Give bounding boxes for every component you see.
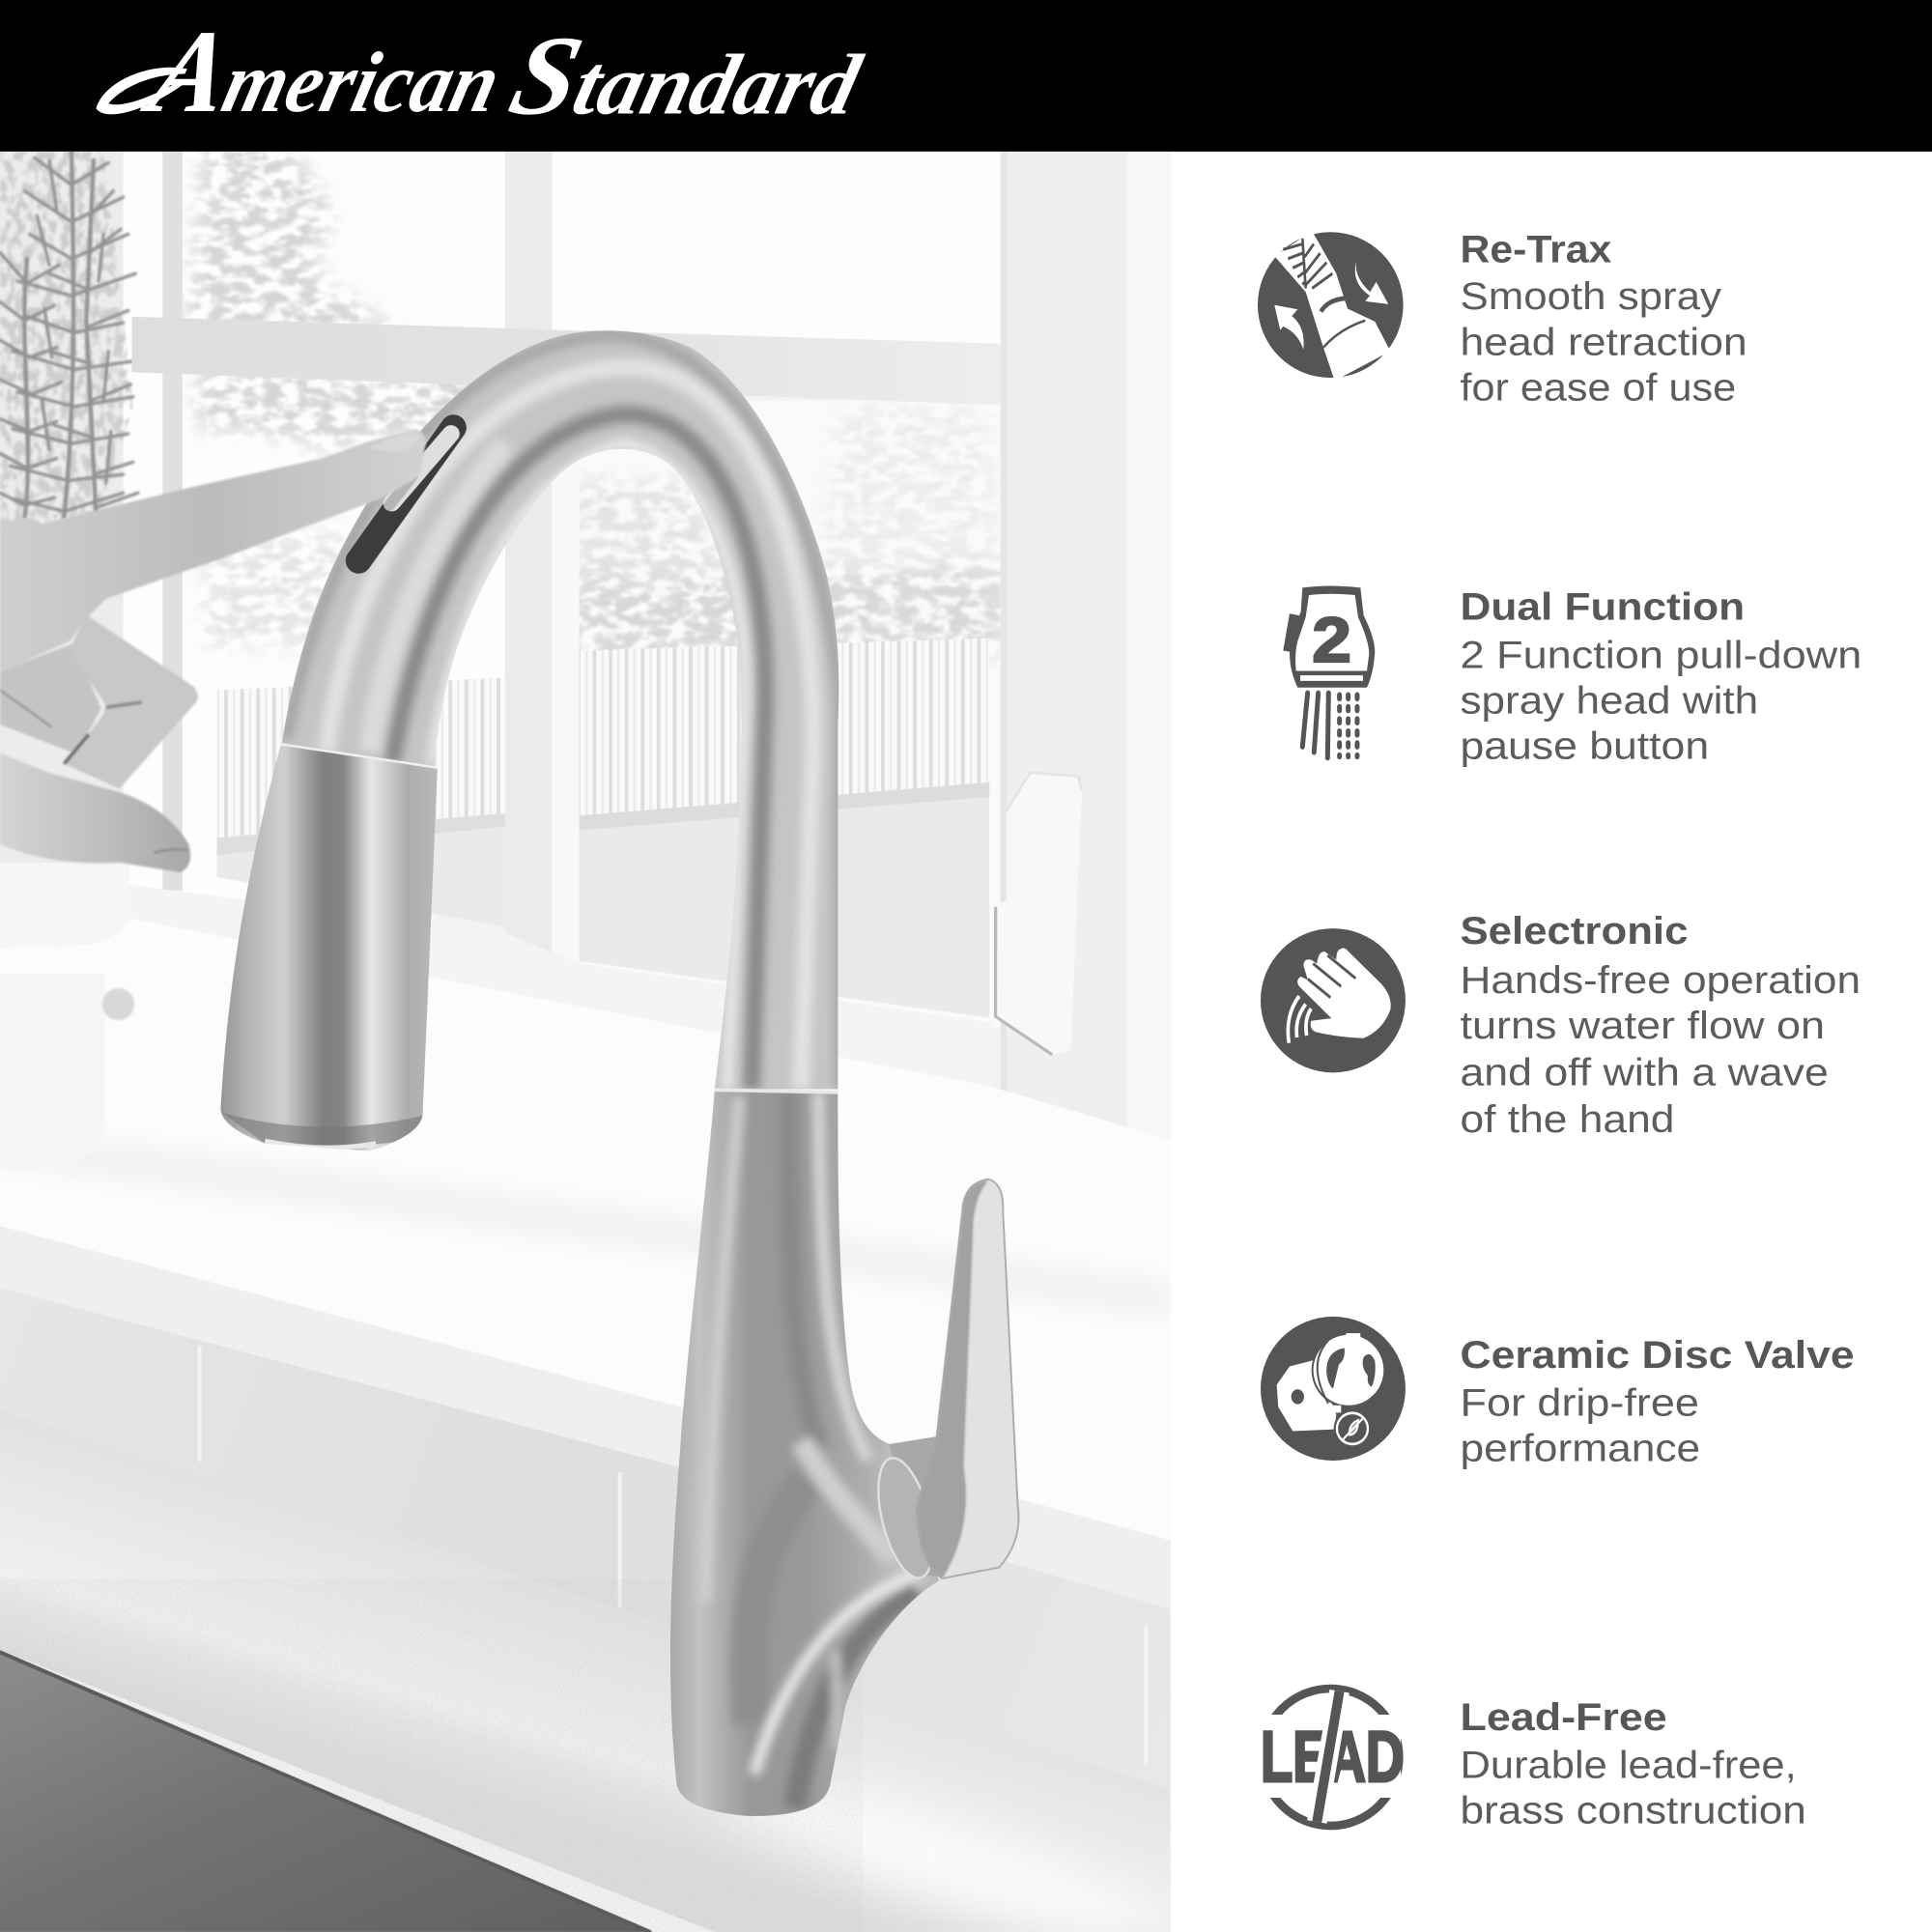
window stile left: [162, 152, 183, 891]
tile backsplash: [0, 1288, 1171, 1789]
middle finger: [64, 614, 198, 788]
right window frame: [1001, 152, 1171, 1150]
window sill frame: [128, 885, 992, 1087]
feature: Ceramic Disc Valve: [1261, 1317, 1855, 1470]
thumb: [0, 753, 190, 872]
ledge front edge: [0, 1226, 1171, 1609]
bright reflection near faucet base: [702, 1753, 1171, 1932]
sink basin: [0, 1650, 653, 1932]
heading: Selectronic: Selectronic: [1460, 910, 1688, 952]
feature: Re-Trax: [1258, 229, 1747, 410]
feature: Lead-Free: [1256, 1689, 1806, 1833]
horizontal window rail: [131, 317, 1005, 406]
feature: Selectronic: [1261, 910, 1861, 1141]
centre mullion: [505, 152, 579, 967]
spray head collar ring: [281, 744, 438, 768]
description: Re-Trax: [1460, 275, 1747, 410]
header bar: [0, 0, 1932, 152]
icon: ceramic disc valve: [1261, 1317, 1406, 1461]
trees outside window: [185, 124, 1005, 666]
potted plant on sill: [0, 863, 129, 1168]
faucet arch tube: [271, 321, 850, 1096]
heading: Dual Function: Dual Function: [1460, 586, 1745, 629]
index finger: [0, 429, 426, 672]
description: Selectronic: Hands-free operation: [1460, 959, 1861, 1002]
icon: lead-free: LEAD: [1261, 1717, 1404, 1797]
description: Selectronic: [1460, 959, 1861, 1141]
hand pressing button: [0, 429, 426, 872]
description: Selectronic: of the hand: [1460, 1098, 1674, 1141]
quartz countertop: [0, 1409, 1171, 1932]
wall behind plant: [0, 152, 126, 916]
faucet body: [666, 1084, 949, 1824]
description: Ceramic Disc Valve: performance: [1460, 1428, 1700, 1470]
wall and window base: [0, 152, 1171, 1932]
description: Dual Function: spray head with: [1460, 680, 1758, 723]
soft sill shadow: [0, 1127, 1171, 1319]
window latch: [996, 773, 1082, 1055]
heading: Ceramic Disc Valve: Ceramic Disc Valve: [1460, 1334, 1855, 1377]
description: Lead-Free: Durable lead-free,: [1460, 1745, 1797, 1787]
description: Dual Function: 2 Function pull-down: [1460, 634, 1861, 676]
description: Ceramic Disc Valve: For drip-free: [1460, 1382, 1699, 1425]
heading: Lead-Free: Lead-Free: [1460, 1696, 1667, 1739]
description: Selectronic: and off with a wave: [1460, 1052, 1829, 1094]
plant on left: [0, 152, 143, 527]
logo: American Standard: [96, 5, 877, 138]
counter speckle: [0, 1578, 863, 1932]
icon: lead-free: [1256, 1689, 1404, 1826]
feature: Dual Function: [1283, 586, 1861, 768]
icon: Re-Trax spray head: [1258, 231, 1404, 381]
faucet lever handle: [868, 1179, 1018, 1583]
description: Selectronic: turns water flow on: [1460, 1005, 1825, 1047]
icon: dual function spray: [1283, 586, 1375, 757]
spray head: [215, 739, 443, 1158]
pause button and sensor: [358, 428, 453, 560]
description: Dual Function: pause button: [1460, 725, 1709, 768]
white window ledge and counter: [0, 918, 1171, 1540]
window panes: [124, 152, 1005, 1029]
icon: waving hand: [1261, 928, 1406, 1072]
round object on sill: [102, 988, 134, 1020]
description: Re-Trax: head retraction: [1460, 321, 1747, 363]
logo: American Standard: American: [132, 5, 517, 136]
photo: kitchen faucet at window: [0, 124, 1171, 1932]
faucet neck collar: [715, 1088, 838, 1094]
description: Lead-Free: brass construction: [1460, 1790, 1806, 1833]
description: Ceramic Disc Valve: [1460, 1382, 1700, 1470]
description: Dual Function: [1460, 634, 1861, 768]
back finger: [0, 643, 101, 754]
picket fence: [216, 639, 989, 855]
description: Lead-Free: [1460, 1745, 1806, 1833]
lawn: [216, 797, 989, 1018]
description: Re-Trax: for ease of use: [1460, 367, 1736, 410]
heading: Re-Trax: Re-Trax: [1460, 229, 1611, 271]
logo: American Standard: Standard: [499, 13, 877, 138]
icon: dual function spray: 2: [1312, 605, 1351, 676]
description: Re-Trax: Smooth spray: [1460, 275, 1721, 318]
